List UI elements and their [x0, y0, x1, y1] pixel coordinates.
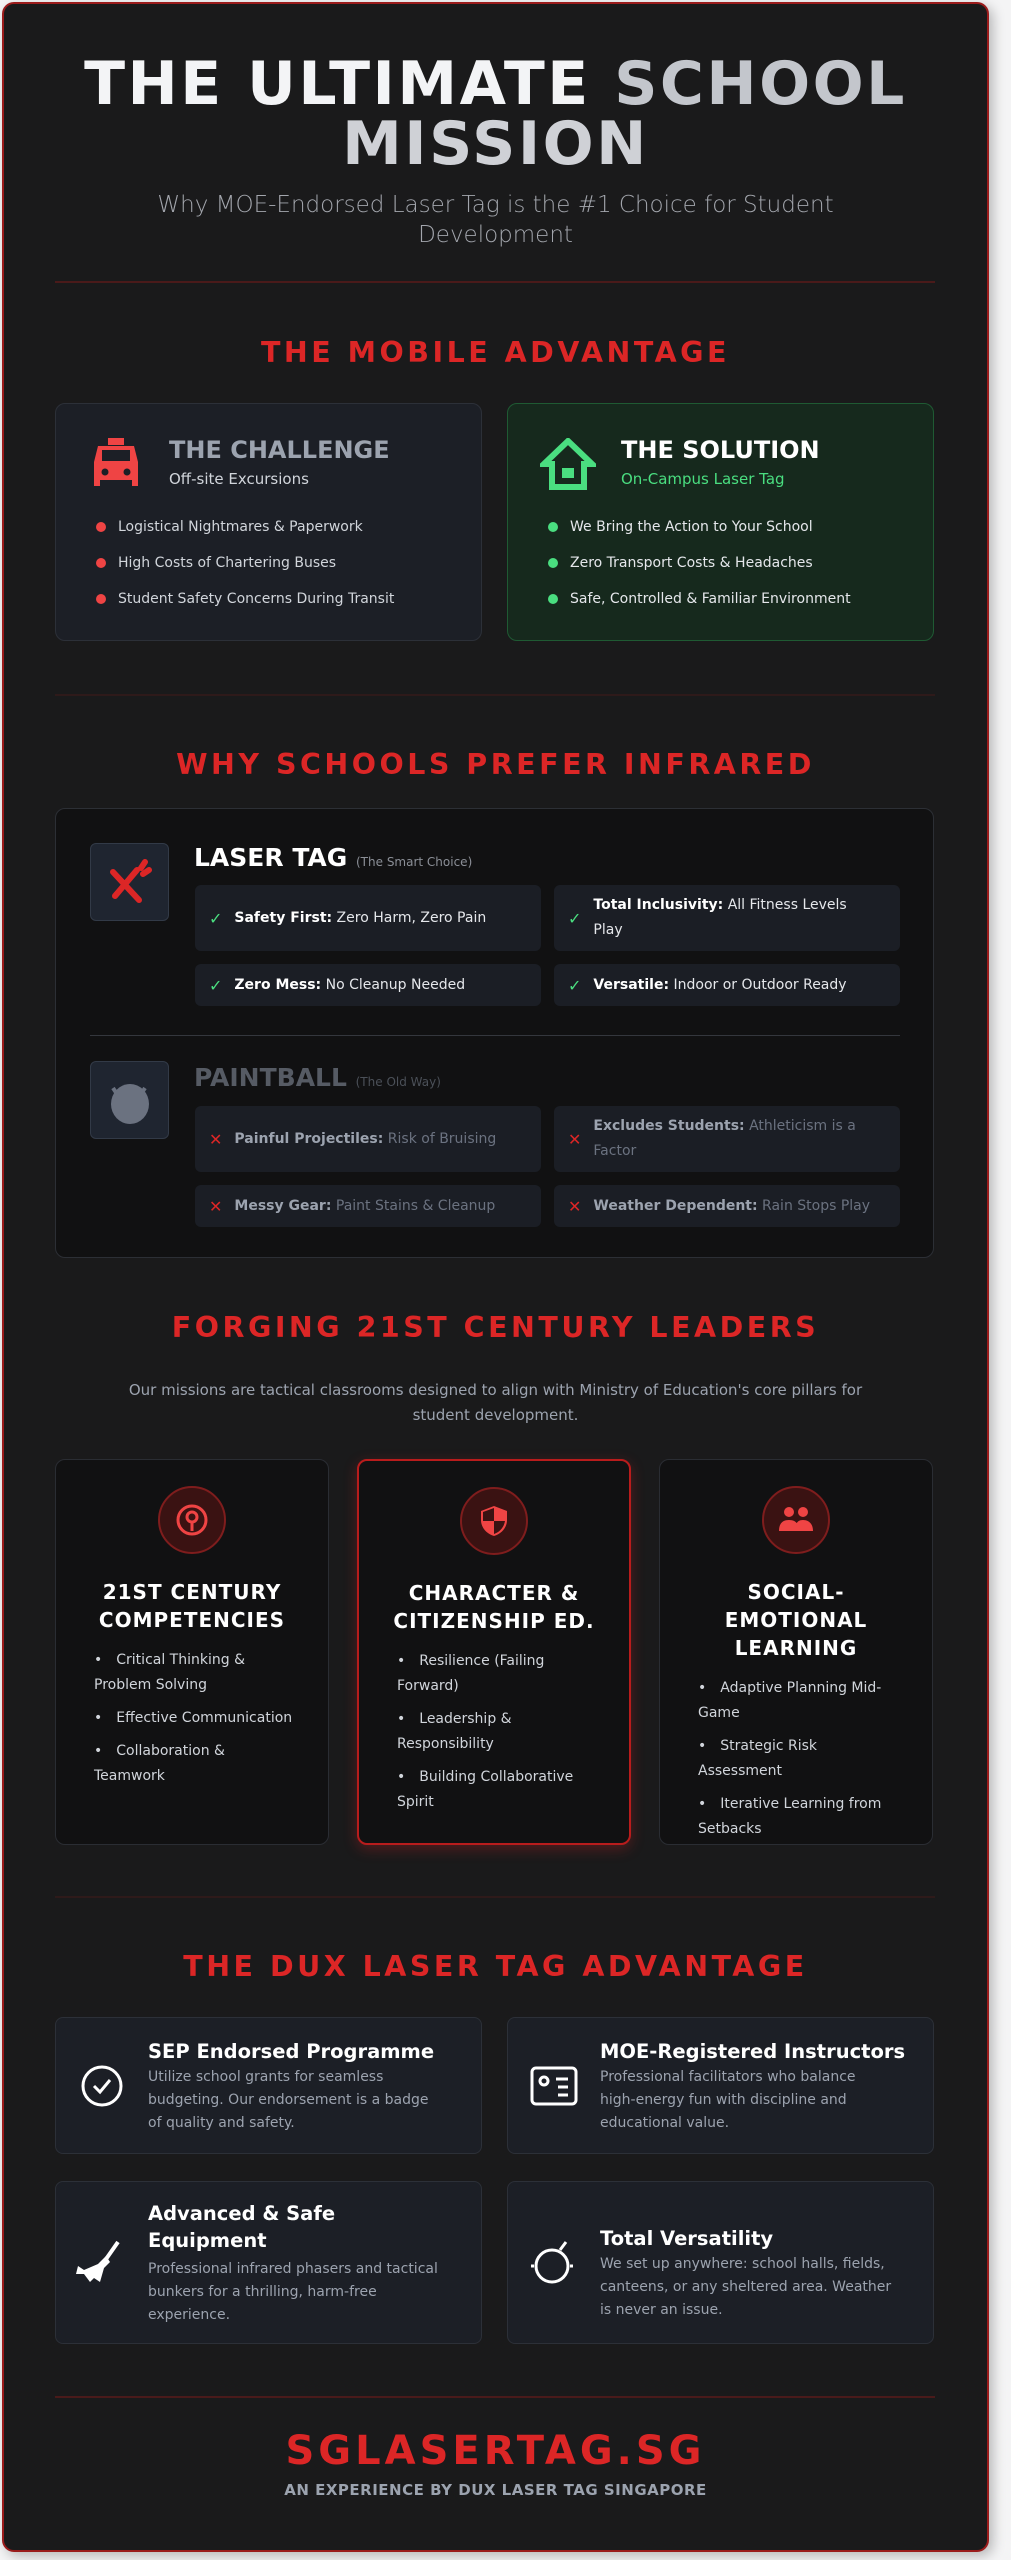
card: equipment: Equipment [148, 2229, 267, 2252]
icon: people [762, 1486, 830, 1554]
card: MOE instructors: Professional facilitators who balance [600, 2069, 856, 2085]
panel: challenge: Off-site Excursions [169, 470, 309, 488]
paintball heading: PAINTBALL (The Old Way) [194, 1063, 441, 1092]
panel: comparison: Excludes Students: Athleticism is a Factor [593, 1118, 856, 1159]
card: SEP: budgeting. Our endorsement is a badge [148, 2092, 428, 2108]
card: equipment: Professional infrared phasers and tactical [148, 2261, 438, 2277]
card: equipment: Advanced & Safe [148, 2202, 335, 2225]
panel: comparison: Total Inclusivity: All Fitness Levels Play [593, 897, 847, 938]
pillar: character: Leadership & Responsibility [397, 1711, 512, 1752]
pillar: SEL: EMOTIONAL [725, 1608, 867, 1632]
card: versatility: Total Versatility [600, 2227, 773, 2250]
card: SEP: Utilize school grants for seamless [148, 2069, 383, 2085]
pillar: 21st century: Problem Solving [94, 1677, 207, 1693]
laser tag heading: LASER TAG (The Smart Choice) [194, 843, 472, 872]
panel: comparison: Messy Gear: Paint Stains & Cleanup [234, 1198, 495, 1214]
icon: blaster [76, 2240, 120, 2282]
solution list [548, 519, 851, 607]
paintball cons [195, 1106, 541, 1172]
card: versatility [507, 2181, 934, 2344]
paintball cons: Painful Projectiles: Risk of Bruising [234, 1130, 496, 1146]
heading: mobile advantage: THE MOBILE ADVANTAGE [261, 336, 730, 369]
pillar: 21st century: Effective Communication [116, 1710, 292, 1726]
card: MOE instructors [507, 2017, 934, 2154]
pillar: SEL: Adaptive Planning Mid-Game [698, 1680, 881, 1721]
card: equipment: experience. [148, 2307, 230, 2323]
icon: house [540, 438, 596, 490]
challenge list [96, 519, 394, 607]
pillar: 21st century [55, 1459, 329, 1845]
title: THE ULTIMATE SCHOOL [84, 49, 907, 119]
challenge heading: THE CHALLENGE [169, 436, 390, 464]
panel: comparison: Zero Mess: No Cleanup Needed [234, 976, 465, 992]
laser pros: ✓ [209, 908, 222, 928]
icon: check circle [82, 2066, 122, 2106]
panel: solution [507, 403, 934, 641]
pillar: SEL: Strategic Risk [720, 1738, 817, 1754]
panel: comparison [55, 808, 934, 1258]
icon: id card [530, 2066, 578, 2106]
pillar: 21st century: Teamwork [94, 1768, 165, 1784]
subtitle: Why MOE-Endorsed Laser Tag is the #1 Choice for Student Development [157, 192, 834, 248]
intro text: Our missions are tactical classrooms designed to align with Ministry of Education's core pillars for [129, 1381, 862, 1399]
card: versatility: We set up anywhere: school halls, fields, [600, 2256, 885, 2272]
laser pros [195, 885, 541, 951]
pillar: SEL: LEARNING [735, 1636, 857, 1660]
heading: dux advantage: THE DUX LASER TAG ADVANTAGE [183, 1950, 808, 1983]
icon: target [158, 1486, 226, 1554]
pillar: character: CITIZENSHIP ED. [393, 1609, 595, 1633]
card: MOE instructors: educational value. [600, 2115, 729, 2131]
challenge list: High Costs of Chartering Buses [118, 555, 336, 571]
panel: comparison: ✕ [568, 1130, 581, 1148]
card: SEP [55, 2017, 482, 2154]
icon: laser [90, 843, 169, 921]
pillar: character: Resilience (Failing Forward) [397, 1653, 544, 1694]
pillar: SEL: Assessment [698, 1763, 782, 1779]
panel: comparison: ✓ [568, 908, 581, 928]
card: equipment [55, 2181, 482, 2344]
pillar: 21st century: 21ST CENTURY [103, 1580, 281, 1604]
heading: leaders: FORGING 21ST CENTURY LEADERS [172, 1311, 819, 1344]
panel: comparison: ✓ [209, 976, 222, 994]
icon: paintball [90, 1061, 169, 1139]
paintball cons: ✕ [209, 1130, 222, 1148]
title [84, 49, 907, 179]
card: versatility: is never an issue. [600, 2302, 723, 2318]
pillar: 21st century: Collaboration & [116, 1743, 225, 1759]
card: SEP: SEP Endorsed Programme [148, 2040, 434, 2063]
panel: comparison: Versatile: Indoor or Outdoor Ready [593, 976, 847, 992]
intro text [129, 1381, 862, 1424]
panel: comparison: Weather Dependent: Rain Stops Play [593, 1198, 870, 1214]
panel: challenge [55, 403, 482, 641]
pillar: character: CHARACTER & [409, 1581, 579, 1605]
solution list: We Bring the Action to Your School [570, 519, 813, 535]
card: versatility: canteens, or any sheltered area. Weather [600, 2279, 891, 2295]
pillar: 21st century: Critical Thinking & [116, 1652, 245, 1668]
icon: globe [531, 2241, 573, 2284]
pillar: 21st century: COMPETENCIES [99, 1608, 285, 1632]
heading: why infrared: WHY SCHOOLS PREFER INFRARED [176, 748, 815, 781]
icon: shield [460, 1487, 528, 1555]
pillar: SEL: SOCIAL- [747, 1580, 845, 1604]
footer tagline: AN EXPERIENCE BY DUX LASER TAG SINGAPORE [284, 2481, 707, 2499]
card: SEP: of quality and safety. [148, 2115, 295, 2131]
panel: comparison: ✓ [568, 976, 581, 994]
card: MOE instructors: high-energy fun with discipline and [600, 2092, 847, 2108]
panel: comparison: ✕ [568, 1196, 581, 1216]
panel: comparison: ✕ [209, 1196, 222, 1216]
challenge list: Logistical Nightmares & Paperwork [118, 519, 363, 535]
icon: bus [94, 438, 138, 486]
title: MISSION [342, 109, 649, 179]
pillar: character [357, 1459, 631, 1845]
card: equipment: bunkers for a thrilling, harm-free [148, 2284, 377, 2300]
footer brand: SGLASERTAG.SG [285, 2428, 706, 2474]
solution list: Safe, Controlled & Familiar Environment [570, 591, 851, 607]
intro text: student development. [413, 1406, 578, 1424]
challenge list: Student Safety Concerns During Transit [118, 591, 394, 607]
solution list: Zero Transport Costs & Headaches [570, 555, 813, 571]
card: MOE instructors: MOE-Registered Instructors [600, 2040, 905, 2063]
pillar: character: Building Collaborative Spirit [397, 1769, 573, 1810]
laser pros: Safety First: Zero Harm, Zero Pain [234, 910, 486, 926]
pillar: SEL: Iterative Learning from Setbacks [698, 1796, 881, 1837]
pillar: SEL [659, 1459, 933, 1845]
panel: solution: On-Campus Laser Tag [621, 470, 785, 488]
solution heading: THE SOLUTION [621, 436, 820, 464]
